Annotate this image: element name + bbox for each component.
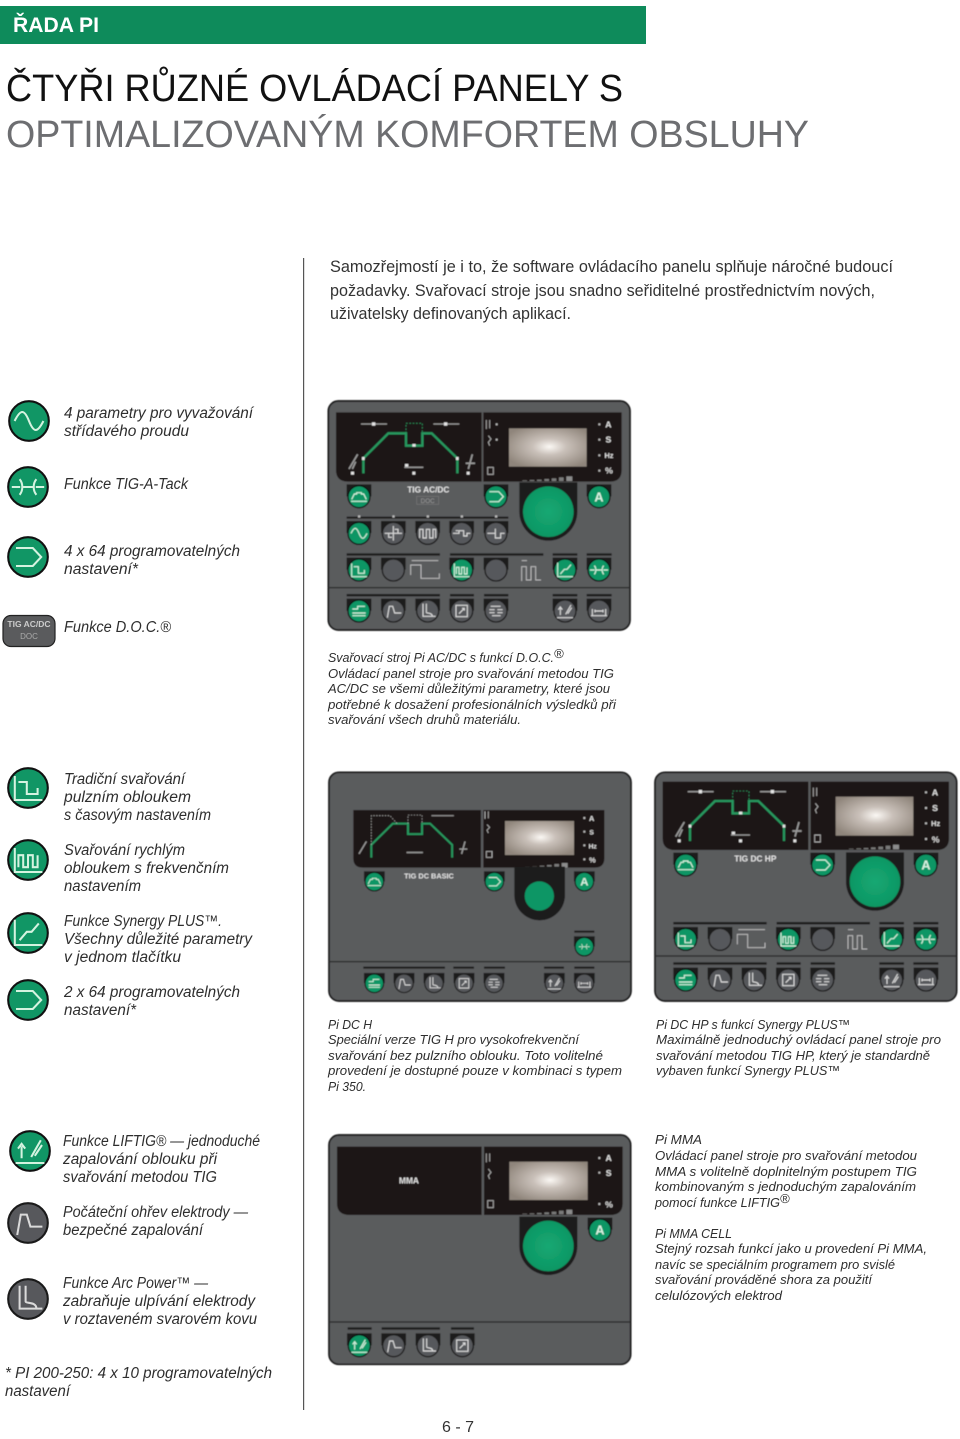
text: fast arc: nastavením <box>64 878 141 895</box>
panel: TIG DC BASIC: Hz <box>589 843 597 850</box>
caption: Pi MMA: kombinovaným s jednoduchým zapalováním <box>655 1179 916 1194</box>
text: Synergy PLUS: Funkce Synergy PLUS™. <box>64 913 222 930</box>
icon: synergy <box>8 913 48 953</box>
feature list: DC <box>8 768 253 1020</box>
caption: Pi MMA <box>654 1132 927 1303</box>
panel: MMA: A <box>595 1224 605 1238</box>
text: arc power: Funkce Arc Power™ — <box>63 1275 208 1292</box>
text: fast arc: Svařování rychlým <box>64 842 185 859</box>
panel: TIG AC/DC: A <box>605 419 612 429</box>
caption: Pi AC/DC: svařování všech druhů materiálu. <box>328 712 521 727</box>
text: arc power: zabraňuje ulpívání elektrody <box>62 1293 256 1310</box>
text: arc power <box>62 1275 257 1328</box>
text: programs: nastavení* <box>64 561 139 578</box>
text: Synergy PLUS: Všechny důležité parametry <box>64 931 253 948</box>
panel: TIG AC/DC: DOC <box>421 498 435 505</box>
header label: ŘADA PI <box>13 12 99 37</box>
text: fast arc <box>64 842 229 895</box>
icon: pulse with time <box>8 768 48 808</box>
panel: TIG AC/DC: S <box>605 435 611 445</box>
text: 2 x 64 <box>63 984 240 1019</box>
icon: sine wave <box>9 401 49 441</box>
footnote: nastavení <box>5 1383 72 1400</box>
icon: DOC badge: TIG AC/DC <box>7 619 51 629</box>
caption: Pi MMA: Ovládací panel stroje pro svařování metodou <box>655 1148 918 1163</box>
caption: Pi DC H: provedení je dostupné pouze v kombinaci s typem <box>327 1063 622 1078</box>
text: fast arc: obloukem s frekvenčním <box>64 860 229 877</box>
text: TIG-A-Tack: Funkce TIG-A-Tack <box>64 476 189 493</box>
caption: Pi AC/DC <box>327 646 617 727</box>
icon: hot start <box>8 1203 48 1243</box>
text: LIFTIG: svařování metodou TIG <box>63 1169 217 1186</box>
caption: Pi DC H: svařování bez pulzního oblouku. Toto volitelné <box>328 1048 603 1063</box>
caption: Pi DC HP: Pi DC HP s funkcí Synergy PLUS™ <box>656 1017 850 1032</box>
feature list: MMA <box>8 1131 260 1328</box>
title: ČTYŘI RŮZNÉ OVLÁDACÍ PANELY S <box>6 65 623 110</box>
text: LIFTIG: zapalování oblouku při <box>62 1151 218 1168</box>
icon: arc power <box>8 1279 48 1319</box>
text: programs <box>64 543 240 578</box>
panel: MMA: S <box>606 1168 612 1178</box>
text: LIFTIG: Funkce LIFTIG® — jednoduché <box>63 1133 260 1150</box>
caption: Pi DC HP: svařování metodou TIG HP, který je standardně <box>656 1048 930 1063</box>
text: Synergy PLUS: v jednom tlačítku <box>64 949 181 966</box>
caption: Pi MMA: pomocí funkce LIFTIG <box>654 1195 780 1210</box>
text: arc power: v roztaveném svarovém kovu <box>63 1311 257 1328</box>
panel: TIG DC BASIC: % <box>589 855 596 864</box>
text: pulse arc: s časovým nastavením <box>64 807 211 824</box>
text: 2 x 64: 2 x 64 programovatelných <box>63 984 240 1001</box>
caption: Pi DC HP: Maximálně jednoduchý ovládací panel stroje pro <box>656 1032 941 1047</box>
panel: TIG DC HP: Hz <box>931 819 940 828</box>
panel: TIG AC/DC <box>328 401 630 630</box>
text: Synergy PLUS <box>64 913 253 966</box>
page number: 6 - 7 <box>442 1419 474 1436</box>
intro text: požadavky. Svařovací stroje jsou snadno seřiditelné prostřednictvím nových, <box>330 282 875 300</box>
intro text: uživatelsky definovaných aplikací. <box>330 305 571 323</box>
text: AC parameters: střídavého proudu <box>64 423 189 440</box>
text: pulse arc: Tradiční svařování <box>64 771 187 788</box>
panel: TIG AC/DC: Hz <box>605 451 614 460</box>
text: LIFTIG <box>62 1133 260 1186</box>
panel: TIG AC/DC: TIG AC/DC <box>407 485 449 495</box>
caption: Pi AC/DC: potřebné k dosažení profesionálních výsledků při <box>327 697 617 712</box>
panel: TIG DC HP: A <box>932 787 939 797</box>
intro text: Samozřejmostí je i to, že software ovládacího panelu splňuje náročné budoucí <box>330 258 893 276</box>
caption: Pi DC H: Pi DC H <box>328 1017 372 1032</box>
panel: MMA <box>329 1135 631 1364</box>
panel: TIG AC/DC: A <box>594 490 604 504</box>
caption: Pi AC/DC: Svařovací stroj Pi AC/DC s funkcí D.O.C. <box>328 650 554 665</box>
text: pulse arc: pulzním obloukem <box>63 789 191 806</box>
panel: TIG DC BASIC: TIG DC BASIC <box>404 871 455 880</box>
text: hot start: Počáteční ohřev elektrody — <box>63 1204 248 1221</box>
caption: Pi DC H: Speciální verze TIG H pro vysokofrekvenční <box>328 1032 580 1047</box>
icon: TIG-A-Tack <box>8 467 48 507</box>
text: 2 x 64: nastavení* <box>64 1002 137 1019</box>
icon: LIFTIG <box>10 1131 50 1171</box>
panel: TIG DC BASIC: S <box>589 830 594 837</box>
intro text <box>330 258 893 323</box>
panel: TIG DC HP: % <box>932 834 940 844</box>
vertical rule <box>303 258 304 1410</box>
panel: TIG DC HP: TIG DC HP <box>734 854 777 864</box>
text: pulse arc <box>63 771 211 824</box>
text: programs: 4 x 64 programovatelných <box>64 543 240 560</box>
caption: Pi AC/DC: AC/DC se všemi důležitými parametry, které jsou <box>327 681 611 696</box>
text: hot start: bezpečné zapalování <box>63 1222 205 1239</box>
caption: Pi DC HP: vybaven funkcí Synergy PLUS™ <box>656 1063 840 1078</box>
icon: DOC badge: DOC <box>20 632 38 641</box>
panel: MMA: MMA <box>399 1176 419 1186</box>
panel: TIG AC/DC: % <box>605 466 613 476</box>
caption: Pi MMA: celulózových elektrod <box>655 1288 783 1303</box>
caption: Pi MMA: navíc se speciálním programem pro svislé <box>655 1257 895 1272</box>
text: AC parameters: 4 parametry pro vyvažování <box>64 405 255 422</box>
text: AC parameters <box>64 405 255 440</box>
panel: TIG DC BASIC: A <box>589 814 595 823</box>
icon: program <box>8 537 48 577</box>
icon: fast pulse <box>8 840 48 880</box>
caption: Pi MMA: Stejný rozsah funkcí jako u provedení Pi MMA, <box>655 1241 927 1256</box>
icon: program 2 <box>8 980 48 1020</box>
panel: TIG DC BASIC: A <box>580 877 588 889</box>
caption: Pi AC/DC: ® <box>554 646 564 661</box>
title <box>6 65 809 156</box>
panel: TIG DC HP: S <box>932 803 938 813</box>
panel: TIG DC HP <box>655 772 957 1001</box>
caption: Pi DC H: Pi 350. <box>328 1079 366 1094</box>
caption: Pi DC HP <box>656 1017 941 1078</box>
icon: DOC badge <box>3 616 55 646</box>
panel: TIG DC BASIC <box>329 772 631 1001</box>
title: OPTIMALIZOVANÝM KOMFORTEM OBSLUHY <box>6 113 809 156</box>
caption: Pi AC/DC: Ovládací panel stroje pro svařování metodou TIG <box>328 666 614 681</box>
panel: TIG DC HP: A <box>921 859 931 873</box>
header bar <box>0 6 646 44</box>
panel: MMA: % <box>605 1199 613 1209</box>
caption: Pi MMA: Pi MMA <box>655 1132 702 1147</box>
caption: Pi MMA: svařování prováděné shora za použití <box>655 1272 873 1287</box>
feature list: AC/DC <box>3 401 255 646</box>
text: hot start <box>63 1204 248 1239</box>
caption: Pi MMA: ® <box>780 1191 790 1206</box>
footnote <box>5 1365 272 1400</box>
caption: Pi MMA: Pi MMA CELL <box>655 1226 732 1241</box>
caption: Pi MMA: MMA s volitelně doplnitelným postupem TIG <box>655 1164 917 1179</box>
text: DOC: Funkce D.O.C.® <box>64 619 172 636</box>
footnote: * PI 200-250: 4 x 10 programovatelných <box>5 1365 272 1382</box>
caption: Pi DC H <box>327 1017 622 1094</box>
panel: MMA: A <box>606 1153 613 1163</box>
